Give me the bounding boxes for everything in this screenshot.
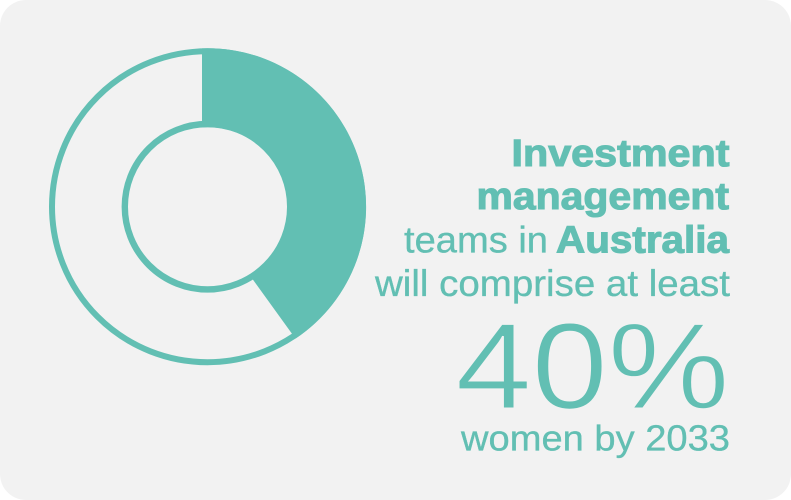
headline line: will comprise at least: will comprise at least [374, 263, 731, 304]
statistic: 40%: 40% [456, 297, 730, 434]
headline line: teams in: teams in [404, 219, 548, 260]
text block: headline [374, 133, 731, 304]
headline line: Investment: Investment [512, 133, 730, 175]
filled 40% segment [202, 48, 366, 339]
inner ring [125, 124, 290, 289]
headline line: management: management [476, 176, 729, 218]
donut chart [52, 48, 366, 362]
headline line: Australia: Australia [556, 219, 730, 261]
text block: women by 2033: women by 2033 [460, 417, 730, 458]
outer ring [52, 51, 363, 362]
